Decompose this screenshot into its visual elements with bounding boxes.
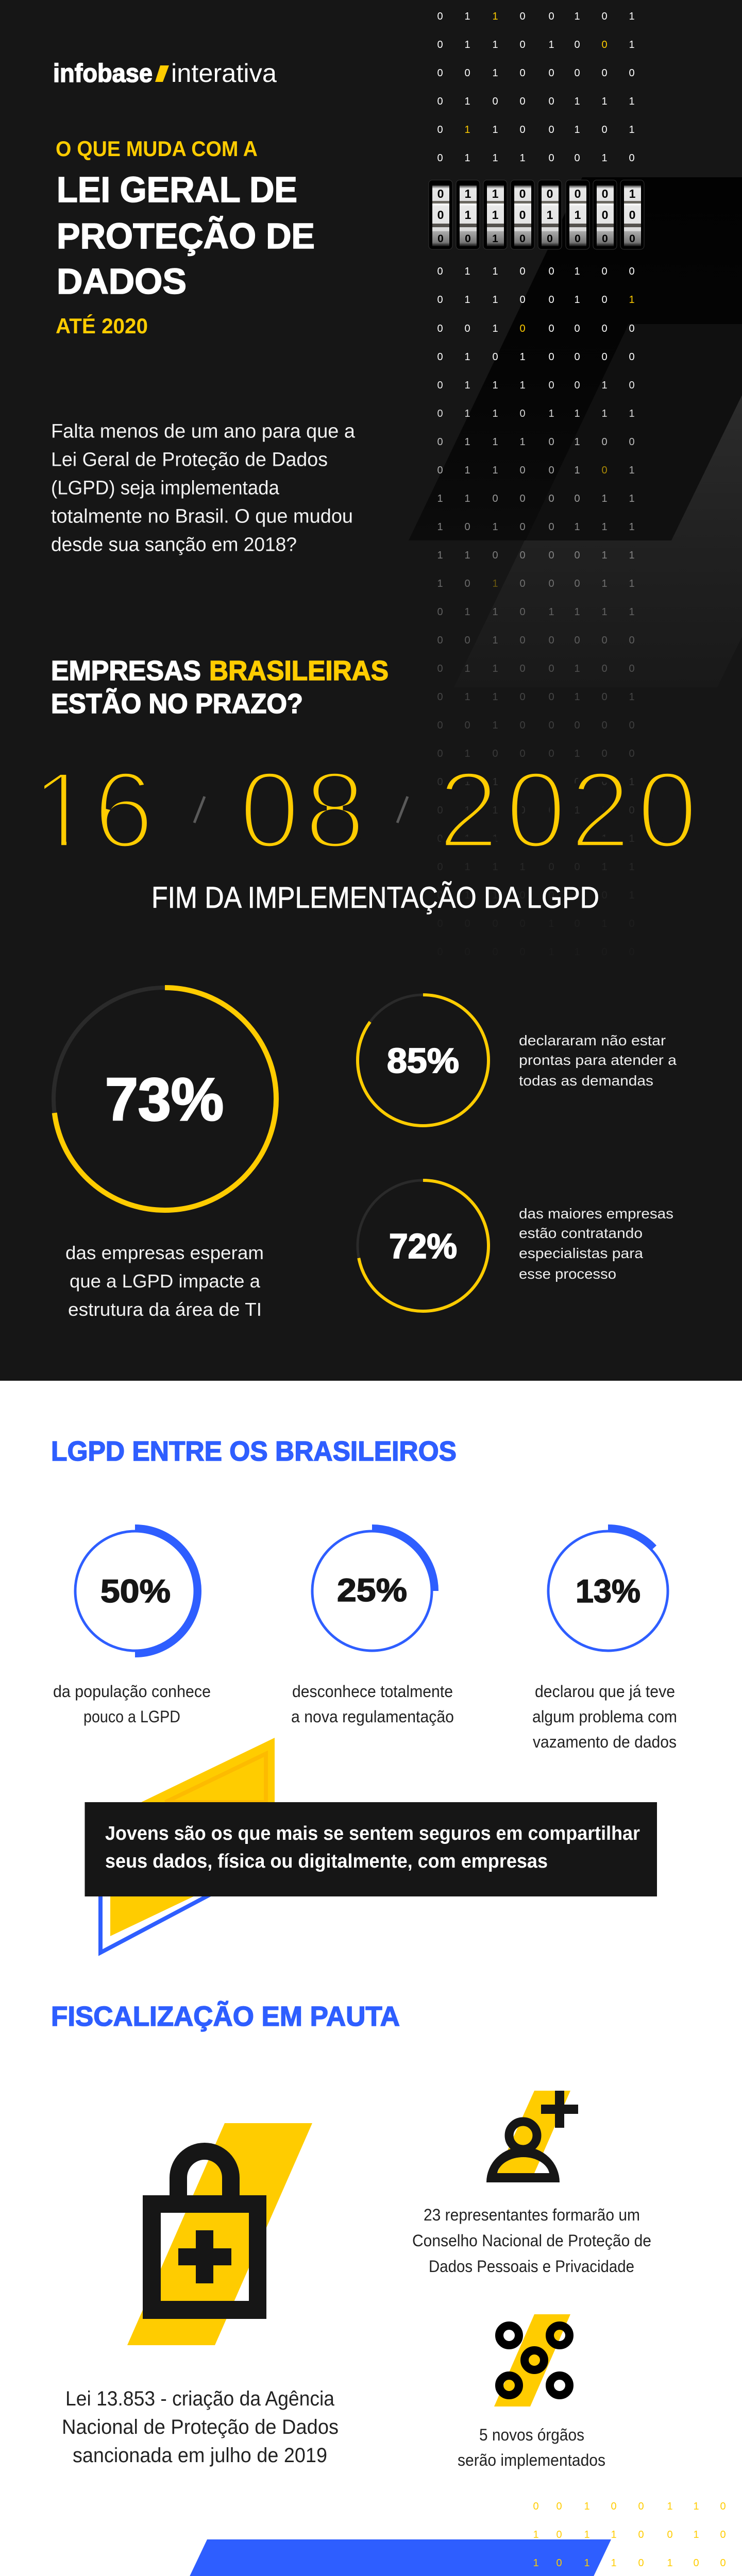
stat: 25 percent: desconhece totalmente bbox=[292, 1682, 453, 1701]
binary combination lock rollers bbox=[429, 180, 644, 249]
binary digits grid: 01101111 bbox=[437, 408, 635, 419]
callout: DPO blue parallelogram bbox=[134, 2539, 611, 2576]
icon: lock with plus bbox=[127, 2123, 312, 2345]
text: 5 novos órgãos bbox=[458, 2426, 605, 2469]
intro text block: totalmente no Brasil. O que mudou bbox=[51, 506, 353, 528]
stat: 50 percent: da população conhece bbox=[53, 1682, 211, 1701]
background lighter parallelogram bbox=[454, 395, 742, 687]
stat: 72 percent: 72% bbox=[389, 1227, 457, 1266]
binary digits grid: 00100000 bbox=[437, 635, 635, 646]
text: lei 13.853: Lei 13.853 - criação da Agência bbox=[65, 2387, 335, 2410]
decorative blue outline bbox=[100, 1754, 266, 1953]
binary digits grid: 01 1 00101 bbox=[437, 11, 635, 22]
icon: five rings bbox=[494, 2314, 570, 2406]
binary digits grid: 01010000 bbox=[437, 351, 635, 363]
binary digits grid: 01000100 bbox=[437, 748, 635, 759]
binary digits grid: 01100001 bbox=[437, 890, 635, 901]
stat: 13 percent: algum problema com bbox=[532, 1707, 677, 1726]
binary digits grid: 01110011 bbox=[437, 861, 635, 873]
background dark parallelogram bbox=[409, 177, 742, 540]
stat: 13 percent: declarou que já teve bbox=[535, 1682, 675, 1701]
text: 23 representantes: Conselho Nacional de Proteção de bbox=[412, 2231, 651, 2250]
stat: 73 percent: que a LGPD impacte a bbox=[70, 1270, 261, 1292]
binary digits grid: 00001010 bbox=[437, 918, 635, 929]
binary combination lock rollers: 01100001 bbox=[437, 187, 636, 200]
stat: 72 percent: especialistas para bbox=[519, 1245, 643, 1261]
callout: jovens: Jovens são os que mais se sentem seguros em compartilhar bbox=[105, 1823, 640, 1844]
stat: 73 percent: das empresas esperam bbox=[65, 1242, 264, 1263]
intro text block: Falta menos de um ano para que a bbox=[51, 420, 356, 442]
stat: 73 percent bbox=[54, 988, 276, 1320]
binary digits grid: 01110010 bbox=[437, 380, 635, 391]
stat: 50 percent: pouco a LGPD bbox=[83, 1707, 180, 1726]
logo: infobase interativa (white) bbox=[53, 59, 277, 88]
text: 23 representantes: Dados Pessoais e Privacidade bbox=[429, 2257, 634, 2276]
heading: empresas brasileiras bbox=[51, 655, 389, 719]
stat: 25 percent: a nova regulamentação bbox=[291, 1707, 454, 1726]
text: 5 novos órgãos: serão implementados bbox=[458, 2451, 605, 2469]
icon: person with plus bbox=[486, 2091, 578, 2182]
subheading: fim da implementação: FIM DA IMPLEMENTAÇÃO DA LGPD bbox=[151, 881, 599, 914]
text: lei 13.853: Nacional de Proteção de Dados bbox=[62, 2416, 339, 2438]
heading: empresas brasileiras: BRASILEIRAS bbox=[209, 655, 389, 686]
title: LEI GERAL DE bbox=[57, 170, 297, 210]
binary digits grid: 011001 0 1 bbox=[437, 465, 635, 476]
title: O QUE MUDA COM A bbox=[56, 137, 258, 161]
text: lei 13.853 bbox=[62, 2387, 339, 2467]
binary digits grid yellow bbox=[22, 2501, 726, 2576]
binary digits grid: 01110010 bbox=[437, 152, 635, 164]
heading: fiscalização em pauta: FISCALIZAÇÃO EM PAUTA bbox=[51, 2001, 400, 2032]
stat: 72 percent bbox=[358, 1180, 673, 1311]
text: lei 13.853: sancionada em julho de 2019 bbox=[73, 2444, 327, 2467]
callout box bbox=[85, 1802, 657, 1896]
binary digits grid yellow: 00100110 bbox=[533, 2501, 726, 2512]
background darkest band bbox=[409, 177, 742, 540]
binary digits grid: 10 1 00011 bbox=[437, 578, 635, 589]
stat: 13 percent: 13% bbox=[576, 1573, 640, 1609]
stat: 50 percent: 50% bbox=[100, 1573, 171, 1609]
binary digits grid: 01100001 bbox=[437, 776, 635, 788]
binary combination lock rollers: 00100000 bbox=[437, 233, 635, 245]
decorative yellow shape bbox=[110, 1738, 275, 1936]
binary digits grid: 0 1 100101 bbox=[437, 124, 635, 135]
stat: 13 percent bbox=[532, 1528, 677, 1751]
binary digits grid: 00100000 bbox=[437, 67, 635, 79]
binary digits grid: 01100100 bbox=[437, 266, 635, 277]
panel: dark intro section bbox=[0, 0, 742, 1381]
intro text block: Lei Geral de Proteção de Dados bbox=[51, 449, 328, 471]
binary combination lock rollers: 01101100 bbox=[437, 208, 635, 222]
title: ATÉ 2020 bbox=[56, 314, 148, 338]
binary digits grid bbox=[437, 11, 635, 958]
binary digits grid yellow: 10110010 bbox=[533, 2529, 726, 2540]
logo: infobase interativa (white): infobase bbox=[53, 59, 153, 88]
stat: 73 percent: estrutura da área de TI bbox=[68, 1299, 262, 1320]
callout: jovens: seus dados, física ou digitalmente, com empresas bbox=[105, 1851, 548, 1872]
binary digits grid: 01100100 bbox=[437, 805, 635, 816]
binary digits grid: 01110100 bbox=[437, 436, 635, 448]
heading: empresas brasileiras: EMPRESAS bbox=[51, 655, 201, 686]
text: 23 representantes bbox=[412, 2206, 651, 2276]
stat: 50 percent bbox=[53, 1528, 211, 1726]
binary digits grid yellow: 10110100 bbox=[533, 2557, 726, 2569]
stat: 25 percent: 25% bbox=[337, 1572, 407, 1608]
title: PROTEÇÃO DE bbox=[57, 216, 315, 256]
text: 23 representantes: 23 representantes formarão um bbox=[424, 2206, 640, 2224]
date separators bbox=[194, 796, 408, 823]
binary digits grid: 01000111 bbox=[437, 96, 635, 107]
heading: empresas brasileiras: ESTÃO NO PRAZO? bbox=[51, 688, 303, 719]
intro text block: desde sua sanção em 2018? bbox=[51, 534, 297, 555]
binary digits grid: 00001100 bbox=[437, 946, 635, 958]
title: DADOS bbox=[57, 261, 187, 301]
stat: 72 percent: esse processo bbox=[519, 1266, 616, 1282]
binary digits grid: 011010 0 1 bbox=[437, 39, 635, 50]
intro text block bbox=[51, 420, 356, 555]
stat: 73 percent: 73% bbox=[105, 1065, 224, 1133]
stat: 72 percent: estão contratando bbox=[519, 1225, 643, 1241]
title bbox=[56, 137, 315, 338]
intro text block: (LGPD) seja implementada bbox=[51, 477, 280, 499]
stat: 85 percent: todas as demandas bbox=[519, 1073, 653, 1089]
stat: 85 percent: declararam não estar bbox=[519, 1032, 666, 1048]
text: 5 novos órgãos: 5 novos órgãos bbox=[479, 2426, 584, 2444]
binary digits grid: 11000011 bbox=[437, 493, 635, 504]
stat: 85 percent: 85% bbox=[387, 1041, 459, 1080]
callout: jovens bbox=[85, 1738, 657, 1953]
stat: 85 percent bbox=[358, 995, 677, 1126]
stat: 25 percent bbox=[291, 1528, 454, 1726]
binary digits grid: 00100000 bbox=[437, 720, 635, 731]
binary digits grid: 001 0 0000 bbox=[437, 323, 635, 334]
stat: 13 percent: vazamento de dados bbox=[533, 1733, 677, 1751]
stat: 85 percent: prontas para atender a bbox=[519, 1052, 677, 1068]
binary digits grid: 0110010 1 bbox=[437, 294, 635, 306]
stat: 72 percent: das maiores empresas bbox=[519, 1206, 673, 1222]
date 16/08/2020: 16082020 bbox=[31, 749, 698, 871]
binary digits grid: 01100100 bbox=[437, 663, 635, 674]
logo: infobase interativa (white): interativa bbox=[171, 59, 277, 88]
binary digits grid: 11000011 bbox=[437, 550, 635, 561]
binary digits grid: 01101111 bbox=[437, 833, 635, 844]
binary digits grid: 01101111 bbox=[437, 606, 635, 618]
binary digits grid: 10100111 bbox=[437, 521, 635, 533]
binary digits grid: 01100101 bbox=[437, 691, 635, 703]
heading: LGPD entre os brasileiros: LGPD ENTRE OS BRASILEIROS bbox=[51, 1436, 457, 1467]
